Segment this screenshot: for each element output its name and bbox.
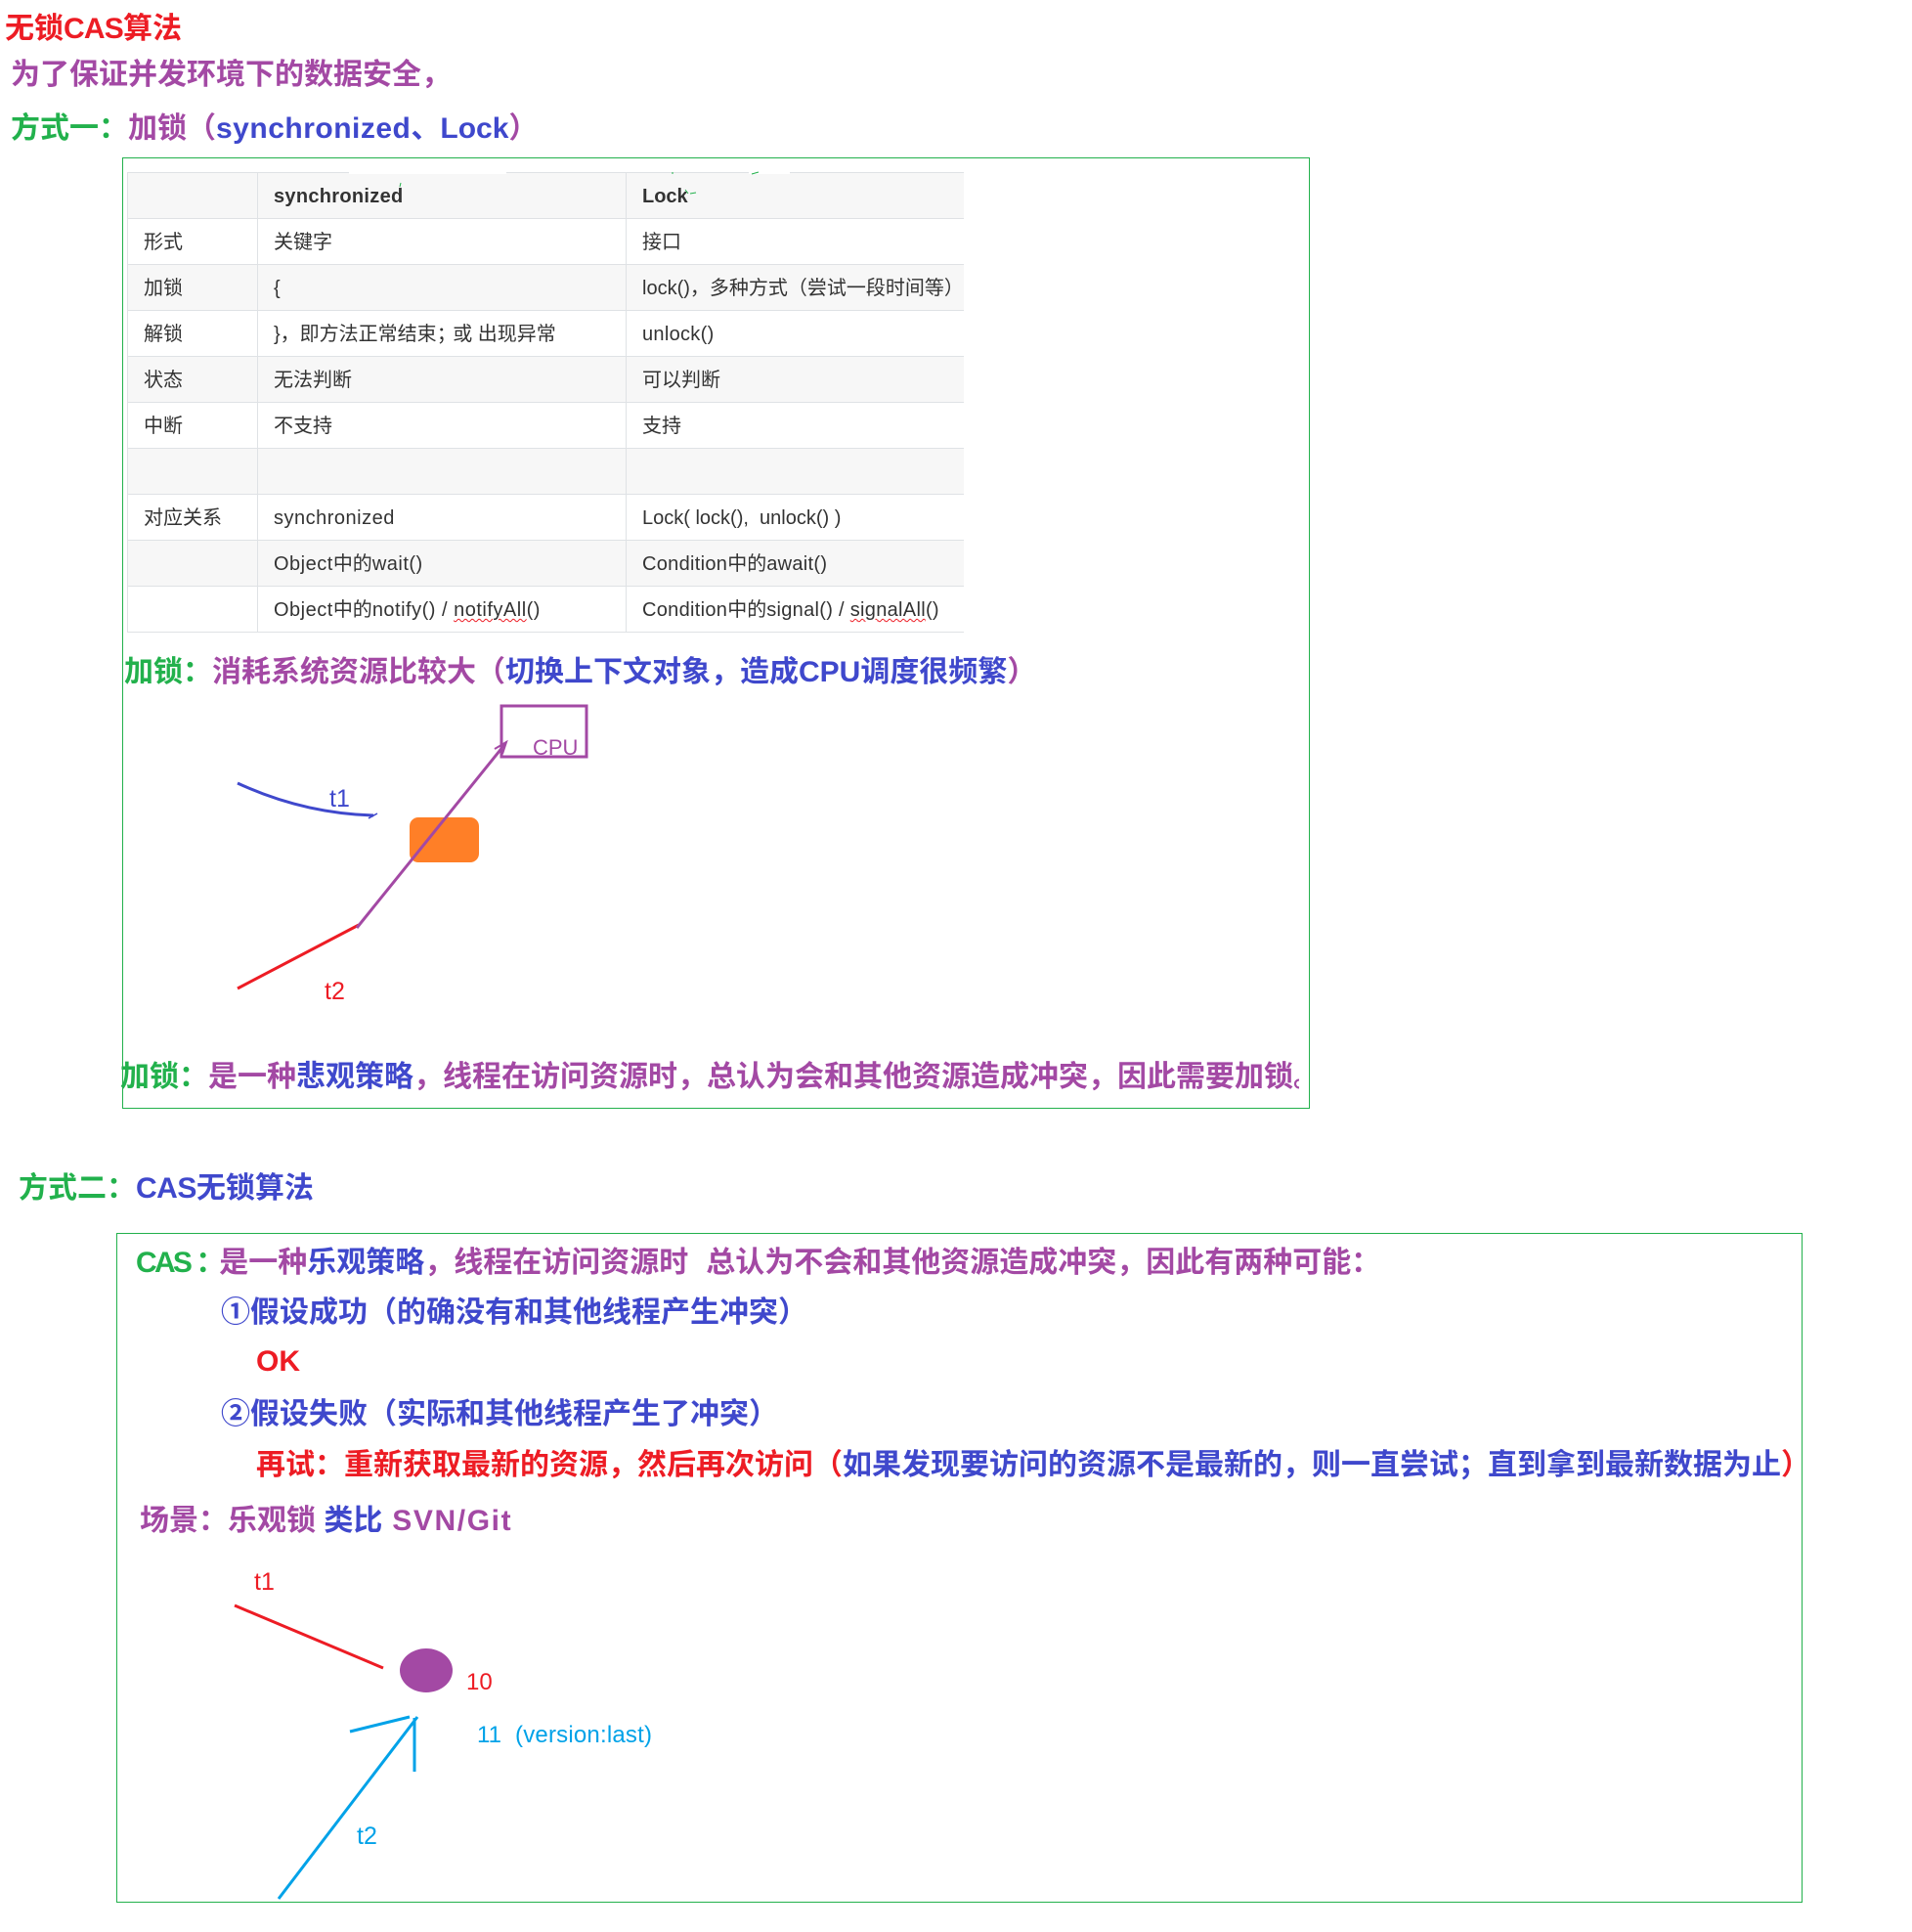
- table: synchronized vs Lock: 可以判断: [642, 370, 720, 391]
- orange blocked task: [410, 817, 479, 862]
- CPU box: CPU: [533, 735, 578, 760]
- locking cost statement: 加锁：消耗系统资源比较大（切换上下文对象，造成CPU调度很频繁）: [124, 656, 1036, 688]
- table: synchronized vs Lock: Condition中的signal() / signalAll(): [642, 599, 939, 621]
- new value label: 11: [477, 1722, 501, 1748]
- thread t1: [235, 1568, 383, 1668]
- table: synchronized vs Lock: 支持: [642, 416, 681, 437]
- heading: method two: 方式二：CAS无锁算法: [19, 1172, 314, 1205]
- table: synchronized vs Lock: synchronized: [274, 186, 404, 207]
- table: synchronized vs Lock: 不支持: [274, 416, 332, 437]
- table: synchronized vs Lock: 无法判断: [274, 370, 352, 391]
- table: synchronized vs Lock: Condition中的await(): [642, 553, 827, 575]
- panel: locking: [122, 157, 1310, 1109]
- thread t2 line: [238, 925, 359, 1005]
- heading: method one: 方式一：加锁（synchronized、Lock）: [11, 112, 538, 145]
- thread t1 line: [238, 783, 377, 818]
- table: synchronized vs Lock: 中断: [144, 416, 183, 437]
- case one result: OK: [256, 1345, 300, 1378]
- case one: ①假设成功（的确没有和其他线程产生冲突）: [221, 1296, 807, 1329]
- new value label: (version:last): [515, 1722, 652, 1748]
- intro heading: 为了保证并发环境下的数据安全，: [11, 59, 451, 91]
- table: synchronized vs Lock: 对应关系: [144, 507, 222, 529]
- diagram: optimistic update: [234, 1568, 652, 1900]
- table: synchronized vs Lock: synchronized: [274, 507, 395, 529]
- thread t1: t1: [254, 1568, 275, 1596]
- panel: CAS: [116, 1233, 1803, 1903]
- table: synchronized vs Lock: 接口: [642, 232, 681, 253]
- table: synchronized vs Lock: Object中的notify() / notifyAll(): [274, 599, 541, 621]
- diagram: threads contending for CPU: [237, 172, 759, 1005]
- table: synchronized vs Lock: 关键字: [274, 232, 332, 253]
- table: synchronized vs Lock: 加锁: [144, 278, 183, 299]
- table: synchronized vs Lock: [127, 172, 964, 633]
- shared resource: 10: [466, 1669, 493, 1695]
- arrow to CPU: [357, 742, 506, 928]
- shared resource: [400, 1648, 493, 1695]
- case two: ②假设失败（实际和其他线程产生了冲突）: [221, 1398, 778, 1430]
- table: synchronized vs Lock: 状态: [144, 370, 183, 391]
- CAS definition: CAS：是一种乐观策略，线程在访问资源时 总认为不会和其他资源造成冲突，因此有两种可能：: [136, 1247, 1380, 1279]
- CPU box: [501, 706, 587, 760]
- scenario: 场景：乐观锁 类比 SVN/Git: [140, 1505, 512, 1537]
- table: synchronized vs Lock: }，即方法正常结束；或 出现异常: [274, 324, 556, 345]
- thread t2 arrow: [279, 1717, 417, 1899]
- table: synchronized vs Lock: unlock(): [642, 324, 715, 345]
- table: synchronized vs Lock: 形式: [144, 232, 183, 253]
- case two result: 再试：重新获取最新的资源，然后再次访问（如果发现要访问的资源不是最新的，则一直尝试；直到拿到最新数据为止）: [256, 1449, 1810, 1481]
- table: synchronized vs Lock: Lock( lock(), unlock() ): [642, 507, 841, 529]
- table: synchronized vs Lock: 解锁: [144, 324, 183, 345]
- table: synchronized vs Lock: Object中的wait(): [274, 553, 423, 575]
- thread t2 line: t2: [325, 978, 345, 1005]
- table: synchronized vs Lock: Lock: [642, 186, 688, 207]
- thread t1 line: t1: [329, 785, 350, 812]
- table: synchronized vs Lock: {: [274, 278, 281, 299]
- table: synchronized vs Lock: lock()，多种方式（尝试一段时间等）: [642, 278, 964, 299]
- title: 无锁CAS算法: [5, 13, 182, 45]
- thread t2 arrow: t2: [357, 1822, 377, 1850]
- pessimistic strategy statement: 加锁：是一种悲观策略，线程在访问资源时，总认为会和其他资源造成冲突，因此需要加锁。: [120, 1061, 1299, 1093]
